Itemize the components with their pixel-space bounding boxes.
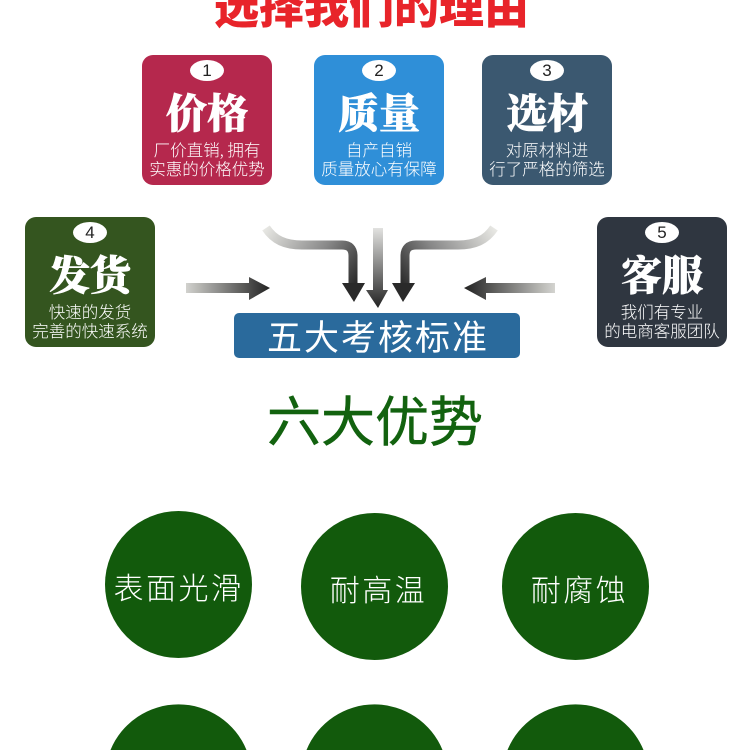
circle: corrosion resistance xyxy=(502,513,649,660)
description: customer service: 的电商客服团队 xyxy=(604,318,720,342)
badge 4: 4 xyxy=(85,223,95,242)
card 1: price xyxy=(142,55,272,185)
circle: smooth surface xyxy=(105,511,252,658)
description: quality: 质量放心有保障 xyxy=(321,156,437,180)
heading: customer service: 客服 xyxy=(621,243,703,302)
card 2: quality xyxy=(314,55,444,185)
arrow: centre vertical xyxy=(366,228,388,308)
description: price xyxy=(149,137,265,180)
banner: five standards: 五大考核标准 xyxy=(267,310,489,361)
badge 3 xyxy=(530,60,564,81)
arrow: left curved xyxy=(266,228,365,302)
description: delivery: 快速的发货 xyxy=(49,299,131,323)
badge 2 xyxy=(362,60,396,81)
description: customer service xyxy=(604,299,720,342)
badge 4 xyxy=(73,222,107,243)
circle: bottom right xyxy=(508,704,644,750)
heading: price: 价格 xyxy=(166,81,248,140)
circle: heat resistance xyxy=(301,513,448,660)
description: delivery xyxy=(32,299,148,342)
badge 1: 1 xyxy=(202,61,212,80)
card 4: delivery xyxy=(25,217,155,347)
section heading: six advantages: 六大优势 xyxy=(267,378,483,457)
description: materials xyxy=(489,137,605,180)
heading: delivery: 发货 xyxy=(49,243,131,302)
circle: bottom centre xyxy=(306,704,442,750)
description: price: 实惠的价格优势 xyxy=(149,156,265,180)
badge 3: 3 xyxy=(542,61,552,80)
badge 2: 2 xyxy=(374,61,384,80)
circle: bottom left xyxy=(110,704,246,750)
badge 5 xyxy=(645,222,679,243)
arrow: right horizontal xyxy=(464,277,555,300)
circle: smooth surface: 表面光滑 xyxy=(114,564,244,608)
arrow: left horizontal xyxy=(186,277,270,300)
circle: heat resistance: 耐高温 xyxy=(330,566,427,610)
arrows converging on the standards banner xyxy=(186,226,555,308)
description: materials: 对原材料进 xyxy=(506,137,588,161)
description: quality: 自产自销 xyxy=(346,137,412,161)
card 3: materials xyxy=(482,55,612,185)
heading: quality: 质量 xyxy=(338,81,420,140)
description: materials: 行了严格的筛选 xyxy=(489,156,605,180)
circle: corrosion resistance: 耐腐蚀 xyxy=(531,566,628,610)
description: price: 厂价直销, 拥有 xyxy=(154,137,260,161)
card 5: customer service xyxy=(597,217,727,347)
description: quality xyxy=(321,137,437,180)
badge 5: 5 xyxy=(657,223,667,242)
heading: materials: 选材 xyxy=(506,81,588,140)
badge 1 xyxy=(190,60,224,81)
description: customer service: 我们有专业 xyxy=(621,299,703,323)
arrow: right curved xyxy=(392,228,494,302)
description: delivery: 完善的快速系统 xyxy=(32,318,148,342)
